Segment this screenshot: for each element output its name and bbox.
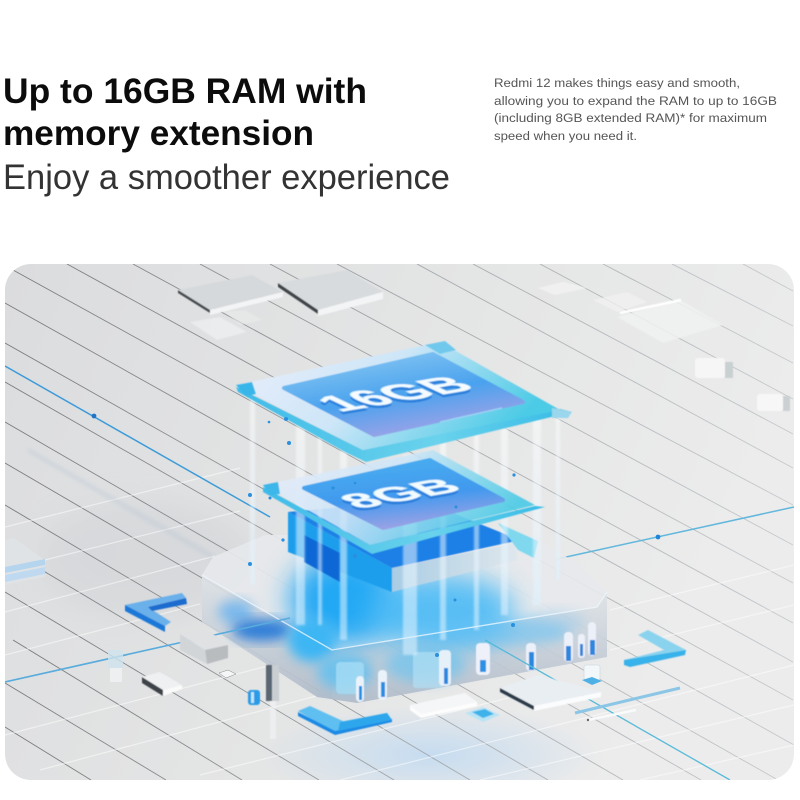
small dark chip [142,672,182,696]
left glass cube [108,650,123,682]
chip: 16GB [236,341,572,462]
gray cube [179,634,228,664]
center white plate [410,693,477,718]
8GB label: 8GB [329,474,472,513]
title: Up to 16GB RAM with [3,72,367,111]
glowing blue data haze [218,555,585,690]
glass tray base [202,535,607,703]
small white block [219,670,236,678]
top left memory plates [178,270,383,340]
blue and white bars [575,688,680,721]
panel: isometric memory illustration [5,264,794,800]
lower right blue circuit line [485,640,730,780]
floating data particles [248,417,516,657]
description text: allowing you to expand the RAM to up to 16GB [494,94,777,108]
floor light lines [5,468,794,780]
left blue bracket [125,593,187,632]
right blue circuit line [557,507,794,559]
16GB label: 16GB [304,371,487,416]
large white plate [500,675,601,711]
small glass cube [582,665,602,685]
description text: (including 8GB extended RAM)* for maximum [494,111,767,125]
bottom blue bracket [298,706,392,735]
8GB label: 8GB [329,477,472,516]
tray front edge highlight [202,575,607,650]
small blue chip [465,707,500,722]
upper left blue circuit line [5,366,270,517]
ghost reflection line [28,450,213,557]
gray pillar [266,665,279,739]
title [3,72,367,153]
top right ghost plates and cubes [538,282,790,411]
floor grid lines [5,264,794,780]
title: memory extension [3,114,314,153]
right blue bracket [624,630,686,667]
16GB label [319,376,472,415]
small glass components in tray [336,622,596,702]
lower left blue circuit line [5,618,290,682]
description text: speed when you need it. [494,129,637,143]
description text [494,76,777,143]
16GB label: 16GB [304,374,487,419]
left ghost plate [5,548,45,582]
memory block [288,500,538,592]
subtitle: Enjoy a smoother experience [3,158,450,197]
chip: 8GB [263,450,545,554]
light beams [250,395,560,655]
description text: Redmi 12 makes things easy and smooth, [494,76,740,90]
small blue capsule [248,690,260,705]
